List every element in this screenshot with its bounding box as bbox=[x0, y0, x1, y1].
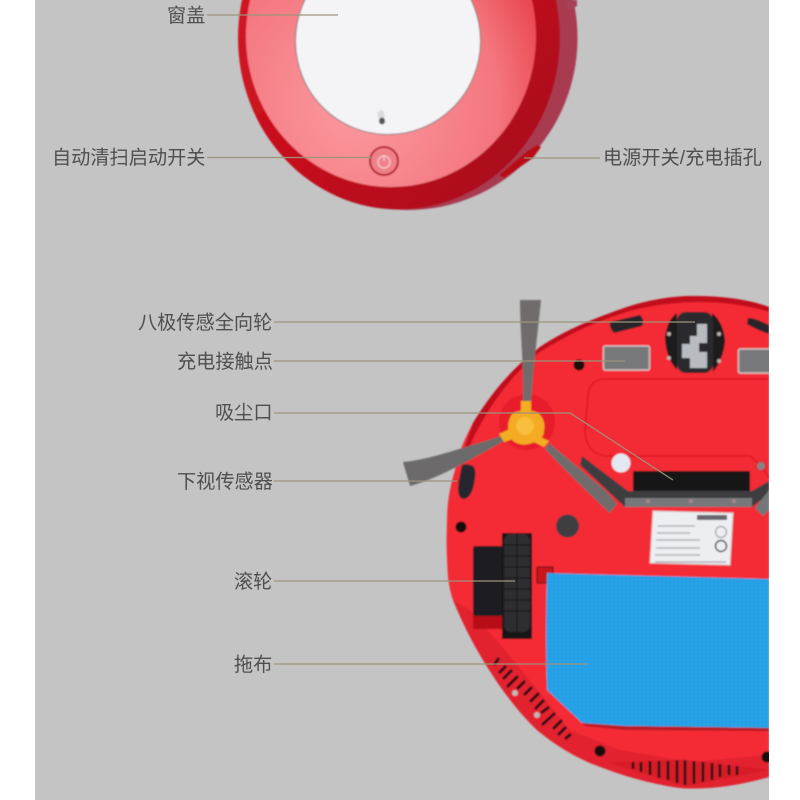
bottom vent bbox=[614, 760, 762, 785]
brush: top bbox=[520, 300, 541, 401]
robot rim bbox=[238, 0, 560, 210]
label: 八极传感全向轮: 八极传感全向轮 bbox=[138, 312, 272, 334]
robot body outline bbox=[447, 296, 769, 788]
yellow hub bbox=[499, 401, 549, 447]
small red latch bbox=[537, 567, 553, 583]
label: 自动清扫启动开关: 自动清扫启动开关 bbox=[52, 147, 206, 169]
charging contacts bbox=[604, 346, 650, 370]
lower facet bbox=[453, 600, 769, 788]
front caster wheel bbox=[665, 312, 725, 373]
label: 吸尘口: 吸尘口 bbox=[215, 402, 273, 424]
label: 滚轮: 滚轮 bbox=[234, 571, 272, 593]
side brush hub recess bbox=[499, 394, 555, 450]
icon: power button bbox=[370, 147, 398, 175]
right brush stub bbox=[755, 490, 769, 516]
bottom holes bbox=[594, 746, 606, 756]
bottom robot: underside view bbox=[403, 296, 772, 788]
product label bbox=[650, 511, 733, 565]
screw bbox=[756, 462, 766, 470]
label: 拖布: 拖布 bbox=[234, 654, 272, 676]
blue mop cloth bbox=[546, 573, 769, 728]
left vent slots bbox=[494, 658, 571, 739]
top sensor slots bbox=[610, 315, 643, 333]
power socket recess bbox=[499, 145, 541, 178]
dust inlet opening bbox=[633, 471, 750, 492]
cliff sensor bbox=[458, 464, 475, 499]
label: 电源开关/充电插孔: 电源开关/充电插孔 bbox=[603, 147, 762, 169]
mop lower edge bbox=[582, 723, 769, 731]
dust inlet metal frame bbox=[580, 456, 769, 507]
drive wheel bbox=[473, 533, 532, 639]
battery cover bbox=[585, 379, 769, 478]
brush: left bbox=[403, 436, 504, 486]
bottom vent slots bbox=[633, 760, 737, 785]
label: 窗盖: 窗盖 bbox=[167, 5, 205, 27]
robot side shell bbox=[393, 0, 578, 211]
glossy top face bbox=[246, 0, 536, 187]
brush: right bbox=[545, 443, 617, 513]
label: 下视传感器: 下视传感器 bbox=[177, 471, 273, 493]
white window bbox=[296, 0, 480, 134]
holes bbox=[456, 522, 466, 532]
round sticker bbox=[612, 454, 630, 472]
vent screws bbox=[512, 690, 540, 718]
window sensor dot bbox=[378, 110, 385, 124]
side switch bbox=[566, 0, 577, 10]
body dark edge bbox=[462, 296, 769, 455]
label: 充电接触点: 充电接触点 bbox=[177, 351, 273, 373]
leader lines bbox=[207, 15, 695, 664]
top robot: red cover view bbox=[238, 0, 578, 210]
